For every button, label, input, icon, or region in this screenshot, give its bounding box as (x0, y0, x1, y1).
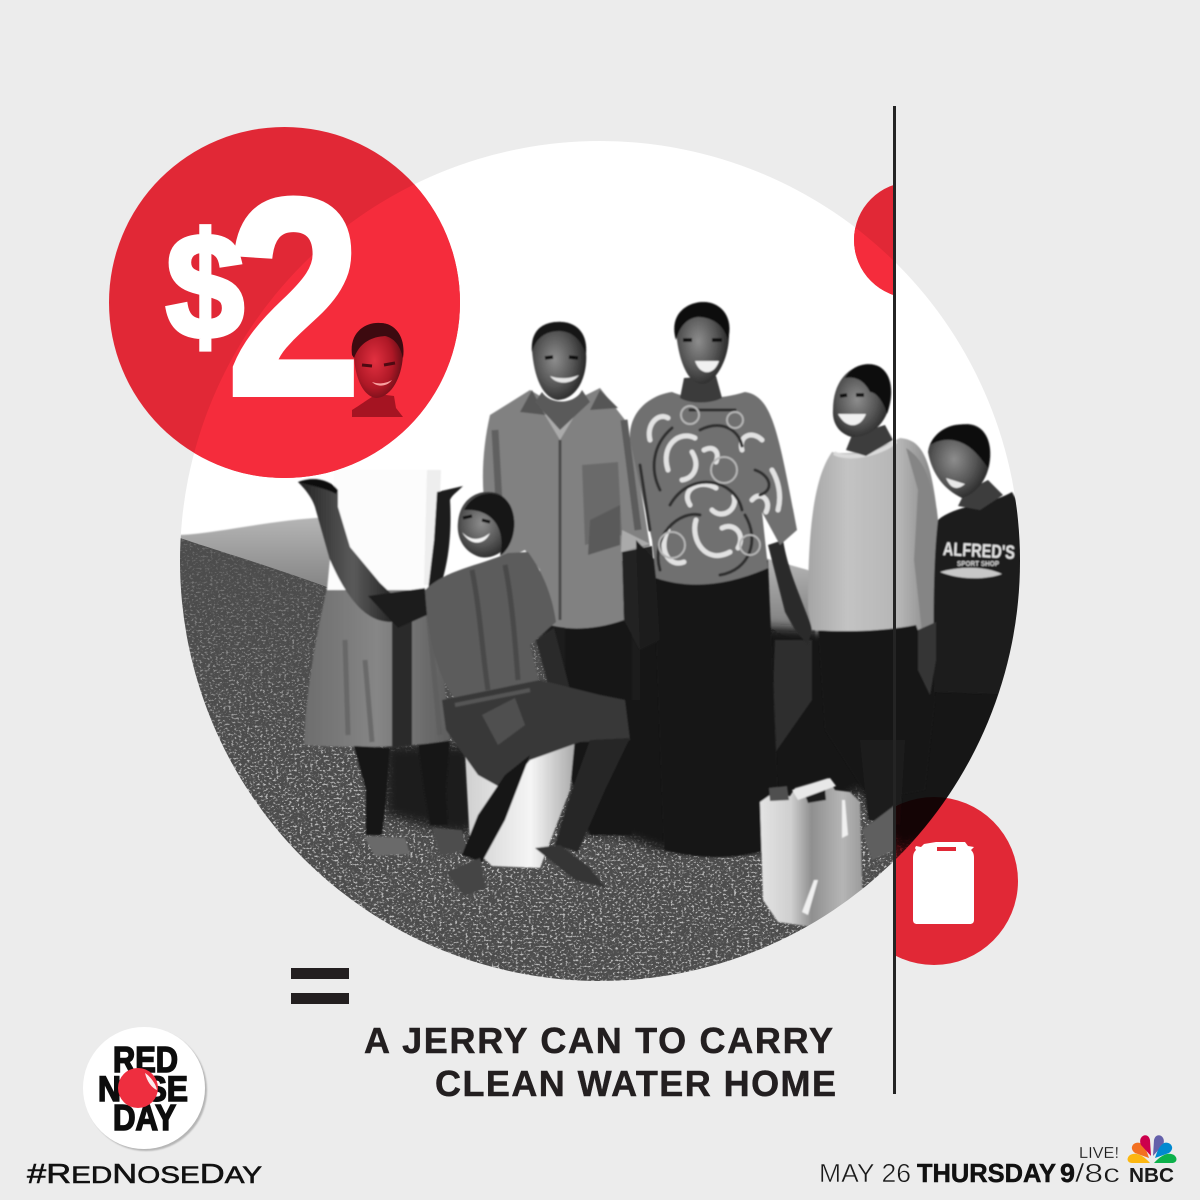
shorts (442, 680, 630, 790)
right arm and hand (768, 540, 812, 645)
logo: Red Nose Day: RED (113, 1039, 178, 1080)
price: $2: 2 (227, 142, 361, 454)
blouse (630, 392, 797, 585)
skirt (304, 582, 450, 747)
logo: Red Nose Day: NOSE (98, 1070, 188, 1109)
person: smiling boy in sweater (808, 364, 939, 825)
caption: a jerry can to carry clean water home: CLEAN WATER HOME (435, 1063, 836, 1104)
right arm (428, 486, 463, 590)
logo: NBC peacock: NBC (1129, 1165, 1174, 1187)
equals sign (291, 968, 349, 1004)
caption: a jerry can to carry clean water home (364, 1020, 836, 1104)
arm (536, 629, 569, 686)
left arm (635, 540, 656, 578)
person: father (483, 322, 660, 835)
panel: family photo in circle (180, 141, 1022, 990)
distant hills (180, 517, 815, 650)
head (535, 390, 590, 430)
shadow behind the family (385, 600, 1020, 850)
head (458, 492, 514, 557)
hashtag: #R ED NOSE DAY (27, 1158, 262, 1189)
red circle: price badge (109, 127, 460, 478)
red duotone portrait of the girl (352, 323, 404, 417)
person: boy in Alfred's shirt: SPORT SHOP (957, 561, 999, 568)
legs (462, 755, 530, 862)
person: girl in white shirt (298, 470, 466, 856)
person: seated boy (425, 492, 630, 896)
skirt (654, 560, 780, 857)
icon: jerry can (913, 842, 974, 924)
logo: NBC peacock (1128, 1135, 1176, 1187)
person: mother (630, 302, 812, 857)
people (298, 302, 1022, 928)
broadcast date and time: THURSDAY (917, 1158, 1056, 1188)
broadcast date and time: 9 (1060, 1158, 1075, 1188)
sandals (446, 858, 486, 896)
red circle behind the photo edge, holding the jerry can icon (896, 798, 1018, 965)
left arm (298, 479, 398, 622)
broadcast date and time: LIVE! (1079, 1145, 1119, 1162)
legs (354, 746, 390, 835)
logo: Red Nose Day (83, 1027, 207, 1151)
head (846, 425, 893, 456)
jerry can under the boy (464, 743, 576, 869)
blouse paisley pattern (640, 406, 780, 575)
caption: a jerry can to carry clean water home: A JERRY CAN TO CARRY (364, 1020, 833, 1061)
broadcast date and time: /8c (1075, 1158, 1120, 1188)
price: $2: $ (166, 202, 244, 370)
vertical divider line (893, 106, 896, 1094)
red circle: partial top right (854, 185, 893, 295)
shirt (425, 552, 556, 705)
dark tint where the red circle overlaps the photo (896, 797, 946, 859)
head (680, 376, 722, 402)
logo: Red Nose Day: DAY (113, 1097, 176, 1138)
broadcast date and time: MAY 26 (819, 1158, 911, 1188)
sandals (364, 836, 410, 856)
person: boy in Alfred's shirt (918, 424, 1022, 695)
head (958, 480, 1003, 510)
shirt print text: ALFRED'S (942, 539, 1015, 564)
hand (482, 698, 525, 745)
price: $2 (166, 142, 361, 454)
ground with debris texture (180, 538, 919, 981)
icon: red nose (118, 1068, 158, 1108)
shirt (326, 484, 430, 592)
broadcast date and time (819, 1145, 1120, 1188)
jerry can on the ground (760, 778, 863, 928)
